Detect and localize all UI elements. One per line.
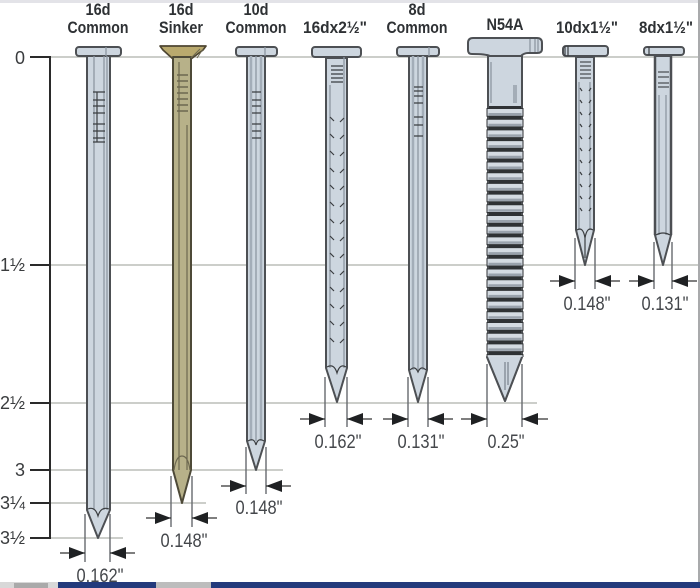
nail: 10d Common (236, 47, 277, 470)
dimension: 16d Sinker 0.148": 0.148" (160, 531, 208, 552)
dimension: N54A 0.25": 0.25" (488, 432, 524, 453)
heading: N54A: N54A (486, 15, 524, 34)
heading: 16dx2½: 16dx2½" (303, 18, 367, 37)
bottom strip (0, 582, 700, 588)
nail: 16d Sinker (160, 46, 206, 503)
depth ruler: 3½ (0, 528, 25, 548)
heading: 8d Common: Common (386, 18, 448, 37)
reference lines (50, 57, 698, 538)
heading: 8dx1½: 8dx1½" (639, 18, 693, 37)
heading: 16d Common: Common (68, 18, 128, 37)
dimension: 10d Common 0.148" (221, 447, 291, 519)
depth ruler: 3¼ (0, 493, 26, 513)
dimension: 10dx1½ 0.148" (550, 238, 620, 315)
heading: 10dx1½: 10dx1½" (556, 18, 618, 37)
dimension: N54A 0.25" (461, 364, 548, 453)
depth ruler (0, 48, 50, 548)
nail: 16d Common (76, 47, 121, 538)
dimension: 16d Common 0.162" (60, 514, 135, 587)
depth ruler: 1½ (0, 255, 25, 275)
dimension: 10d Common 0.148": 0.148" (236, 498, 282, 519)
depth ruler: 3 (15, 460, 25, 480)
nail: 8dx1½ (644, 47, 684, 265)
heading: 10d Common: 10d (244, 0, 268, 19)
dimension: 8d Common 0.131" (383, 377, 453, 453)
dimension: 16d Common 0.162": 0.162" (76, 566, 124, 587)
dimension: 8d Common 0.131": 0.131" (398, 432, 444, 453)
heading: 16d Common: 16d (86, 0, 110, 19)
depth ruler: 2½ (0, 393, 25, 413)
dimension: 8dx1½ 0.131": 0.131" (642, 294, 688, 315)
dimension: 16dx2½ 0.162" (300, 377, 372, 453)
depth ruler: 0 (15, 48, 25, 68)
dimension: 8dx1½ 0.131" (629, 242, 697, 315)
heading: 16d Sinker: 16d (168, 0, 194, 19)
nail: N54A (468, 38, 542, 401)
dimension: 16d Sinker 0.148" (146, 476, 217, 552)
nail: 10dx1½ (563, 46, 608, 265)
heading: 10d Common: Common (226, 18, 286, 37)
nail: 8d Common (397, 47, 439, 402)
dimension: 16dx2½ 0.162": 0.162" (314, 432, 362, 453)
nail: 16dx2½ (312, 47, 361, 402)
dimension: 10dx1½ 0.148": 0.148" (564, 294, 610, 315)
heading: 16d Sinker: Sinker (159, 18, 203, 37)
heading: 8d Common: 8d (408, 0, 426, 19)
